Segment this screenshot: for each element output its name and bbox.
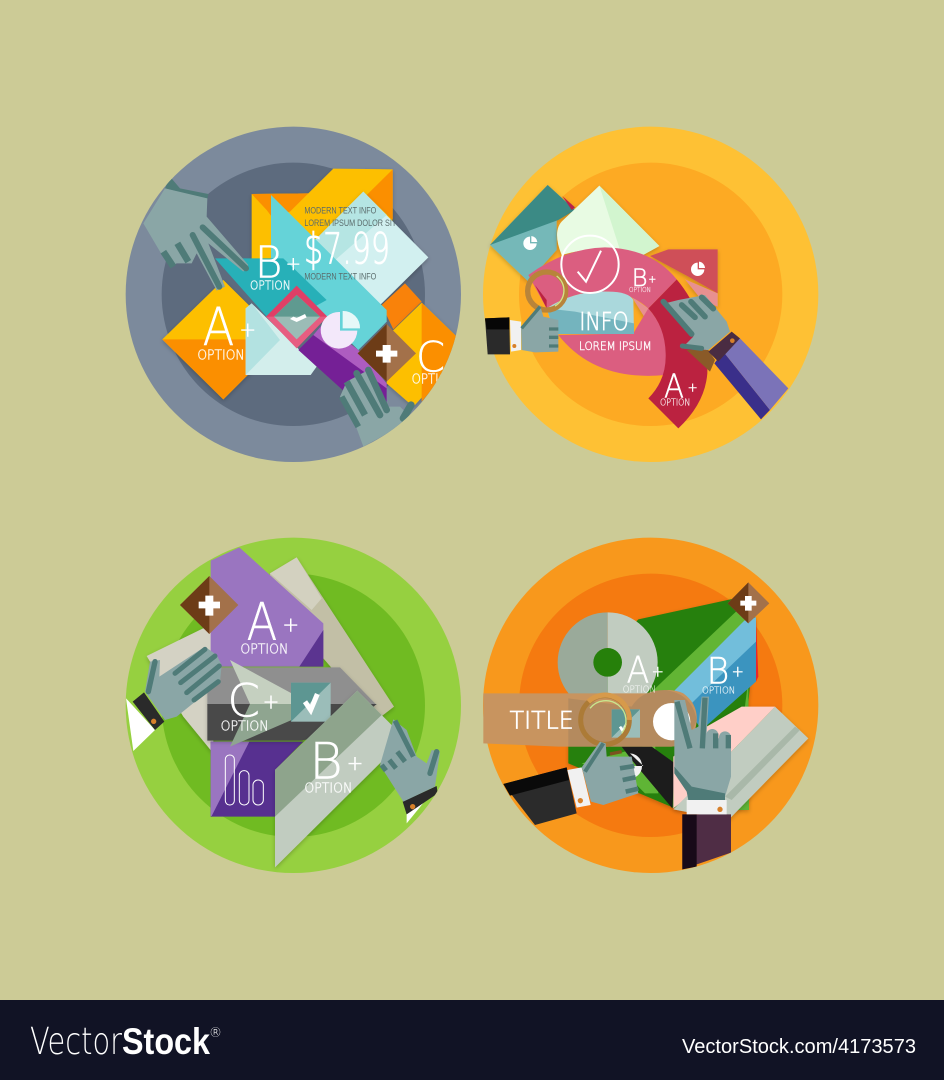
registered mark: ® [209,1026,222,1041]
purple top panel [211,547,323,667]
pink ribbon [528,247,677,308]
price block: $7.99 [304,224,390,274]
A option label: A [203,297,234,358]
A option label: OPTION [197,347,245,363]
magnifier [528,272,566,310]
A label: A [247,593,277,653]
B label: B [632,264,648,292]
B label: B [309,732,343,790]
white circle [653,703,690,740]
pale blue diamond [312,192,428,308]
C label: OPTION [221,719,269,735]
option C diamond [387,303,457,407]
B option label: OPTION [250,278,291,293]
yellow and orange folded back panel [252,169,393,263]
A label: OPTION [240,642,288,658]
C label [221,675,279,735]
image id: VectorStock.com/4173573 [682,1036,916,1058]
title ribbon [483,690,697,747]
C label: + [263,689,279,713]
small crimson fold [535,285,547,308]
brand logo [30,1020,210,1063]
A label: + [282,613,299,637]
B label [304,732,363,796]
check square behind lens [612,709,640,738]
A label [623,649,664,695]
A label [660,367,698,409]
left hand with dark sleeve [485,305,558,354]
panel: yellow circle with info [483,127,818,462]
outer and inner discs [126,127,461,462]
B option label: B [255,239,282,289]
lower pink ribbon [558,308,667,376]
price block [304,205,397,281]
footer bar [0,1000,944,1080]
red check diamond [266,286,327,348]
right hand with purple sleeve [674,697,731,869]
A label [240,593,299,658]
pale green diamond [557,186,659,257]
aqua ribbon [271,195,387,350]
A label: A [627,649,649,692]
pale arrow [230,660,292,747]
outer and inner discs [483,127,818,462]
A label: OPTION [623,684,656,695]
B label: + [732,664,744,681]
pie icon [321,311,360,349]
bar chart icon [225,755,263,805]
plus diamond [358,324,416,382]
C option label: OPTION [412,372,457,387]
disc [558,612,658,712]
B option label: + [286,254,301,275]
black fold [622,747,675,808]
price block: MODERN TEXT INFO [304,205,376,215]
green back panel [568,598,756,810]
purple bottom panel [211,742,303,817]
orange corner diamond [382,283,422,329]
hand from bottom [340,370,412,447]
A option label: + [239,318,256,342]
outer and inner discs [483,538,818,873]
teal envelope [490,185,575,282]
blue panel [672,617,758,730]
B label: B [707,649,729,692]
C option label [412,340,444,384]
brand logo: Stock [122,1021,210,1062]
hand pointing from top left [143,177,248,291]
pale panel under A [246,303,317,375]
panel: green circle with options [126,538,461,873]
A option label [197,297,256,363]
plus diamond [728,582,769,623]
beige back sheets [147,557,394,753]
purple ribbon [298,323,387,403]
B ribbon [275,691,405,867]
title label: TITLE [510,706,574,734]
B label: OPTION [304,780,352,796]
outer and inner discs [126,538,461,873]
right hand with purple sleeve [663,295,788,419]
C label: C [227,675,260,728]
left hand with dark sleeve [503,742,638,825]
crimson ribbon [648,279,707,428]
plus diamond [180,576,238,634]
INFO label: INFO [579,307,629,336]
C option label: C [416,333,445,382]
B label: OPTION [629,286,651,294]
red folder panel [632,249,718,333]
price block: MODERN TEXT INFO [304,271,376,281]
price block: LOREM IPSUM DOLOR SIT [304,218,397,228]
pink and grey box [673,707,808,820]
teal info panel [547,292,634,334]
A label: OPTION [660,398,690,409]
teal ribbon B [215,258,327,317]
right hand [380,719,440,823]
B label: + [347,751,363,775]
brand logo: Vector [30,1020,123,1063]
A label: + [652,664,664,681]
A label: + [688,381,698,395]
B label: OPTION [702,685,735,696]
small pie [630,753,643,777]
grey arrow panel [207,667,377,741]
green stripe [650,611,749,700]
left hand [126,647,222,751]
A label: A [664,367,684,406]
check square [291,683,331,722]
B label [702,649,744,696]
check circle [561,236,619,293]
option A diamond [162,280,250,400]
lorem label: LOREM IPSUM [579,339,652,353]
B option label [250,239,301,293]
panel: orange circle with title [483,538,818,873]
magnifier [581,695,629,754]
B label: + [648,274,656,285]
panel: grey circle with price [126,127,461,462]
B label [629,264,656,294]
